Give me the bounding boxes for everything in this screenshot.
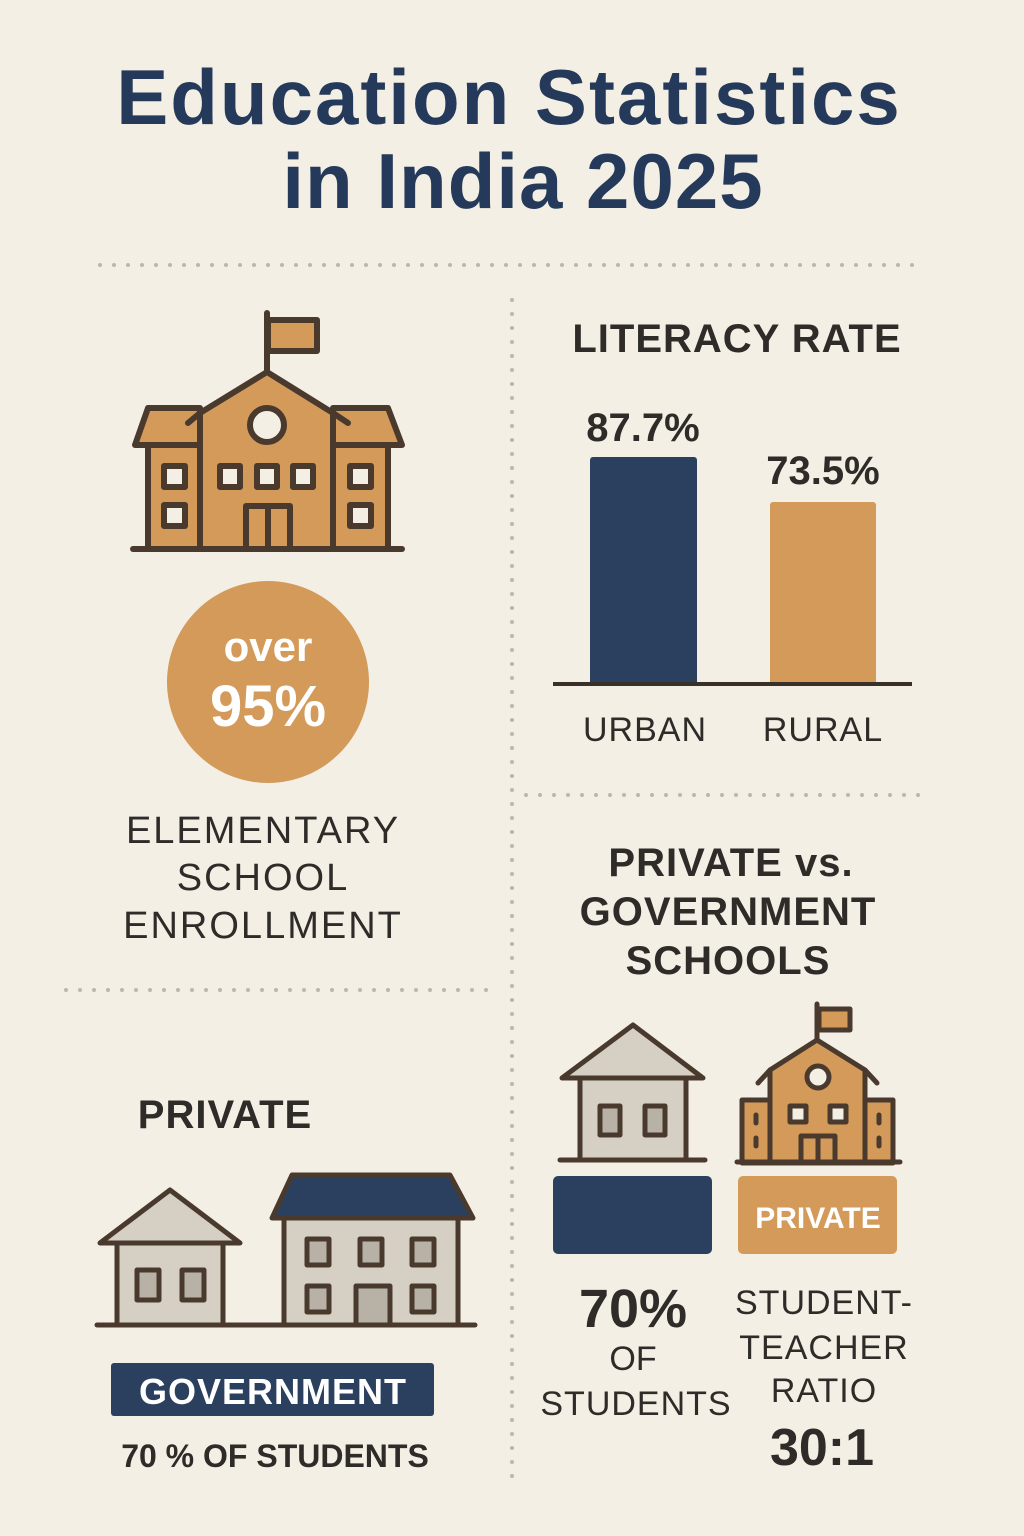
stat: student-teacher ratio: STUDENT-: [735, 1284, 913, 1322]
stat: student-teacher ratio: TEACHER: [739, 1329, 909, 1367]
heading: private vs government schools: PRIVATE vs.: [608, 841, 854, 885]
label: government: GOVERNMENT: [139, 1371, 407, 1412]
label: elementary school enrollment: [123, 810, 403, 947]
label boxes: [553, 1176, 712, 1254]
text: 70% of students: 70 % OF STUDENTS: [121, 1438, 429, 1474]
stat circle: over 95%: 95%: [210, 674, 326, 739]
bar chart: 87.7%: [586, 406, 700, 450]
title: in India 2025: [282, 137, 764, 225]
stat: 70% of students: [540, 1279, 732, 1423]
bar chart: URBAN: [583, 711, 707, 749]
panel: private vs government: [540, 841, 913, 1477]
stat: student-teacher ratio: [735, 1284, 913, 1477]
stat: 70% of students: 70%: [579, 1279, 687, 1339]
panel: literacy rate: [553, 317, 912, 749]
label: elementary school enrollment: SCHOOL: [177, 857, 349, 899]
stat: 70% of students: OF: [609, 1340, 657, 1378]
panel: elementary enrollment: [123, 313, 403, 947]
panel: private vs government: PRIVATE: [755, 1202, 881, 1235]
icon: school building: [133, 313, 402, 549]
label: elementary school enrollment: ELEMENTARY: [126, 810, 400, 852]
panel: private/government houses: [97, 1093, 475, 1474]
label: elementary school enrollment: ENROLLMENT: [123, 905, 403, 947]
heading: private: PRIVATE: [138, 1093, 312, 1137]
heading: literacy rate: LITERACY RATE: [572, 317, 902, 361]
bar chart: 73.5%: [766, 449, 880, 493]
heading: private vs government schools: SCHOOLS: [626, 939, 830, 983]
icon: private school: [737, 1004, 900, 1163]
stat circle: over 95%: over: [224, 623, 312, 670]
heading: private vs government schools: [580, 841, 876, 983]
bar chart: [553, 406, 912, 749]
heading: private vs government schools: GOVERNMENT: [580, 890, 876, 934]
stat circle: over 95%: [167, 581, 369, 783]
bar chart: RURAL: [763, 711, 883, 749]
stat: student-teacher ratio: RATIO: [771, 1372, 877, 1410]
icon: government house: [560, 1025, 705, 1160]
stat: 70% of students: STUDENTS: [540, 1385, 732, 1423]
stat: student-teacher ratio: 30:1: [770, 1419, 874, 1477]
title: Education Statistics: [116, 53, 902, 141]
title: [116, 53, 902, 225]
label: government: [111, 1363, 434, 1416]
icon: houses: [97, 1175, 475, 1325]
